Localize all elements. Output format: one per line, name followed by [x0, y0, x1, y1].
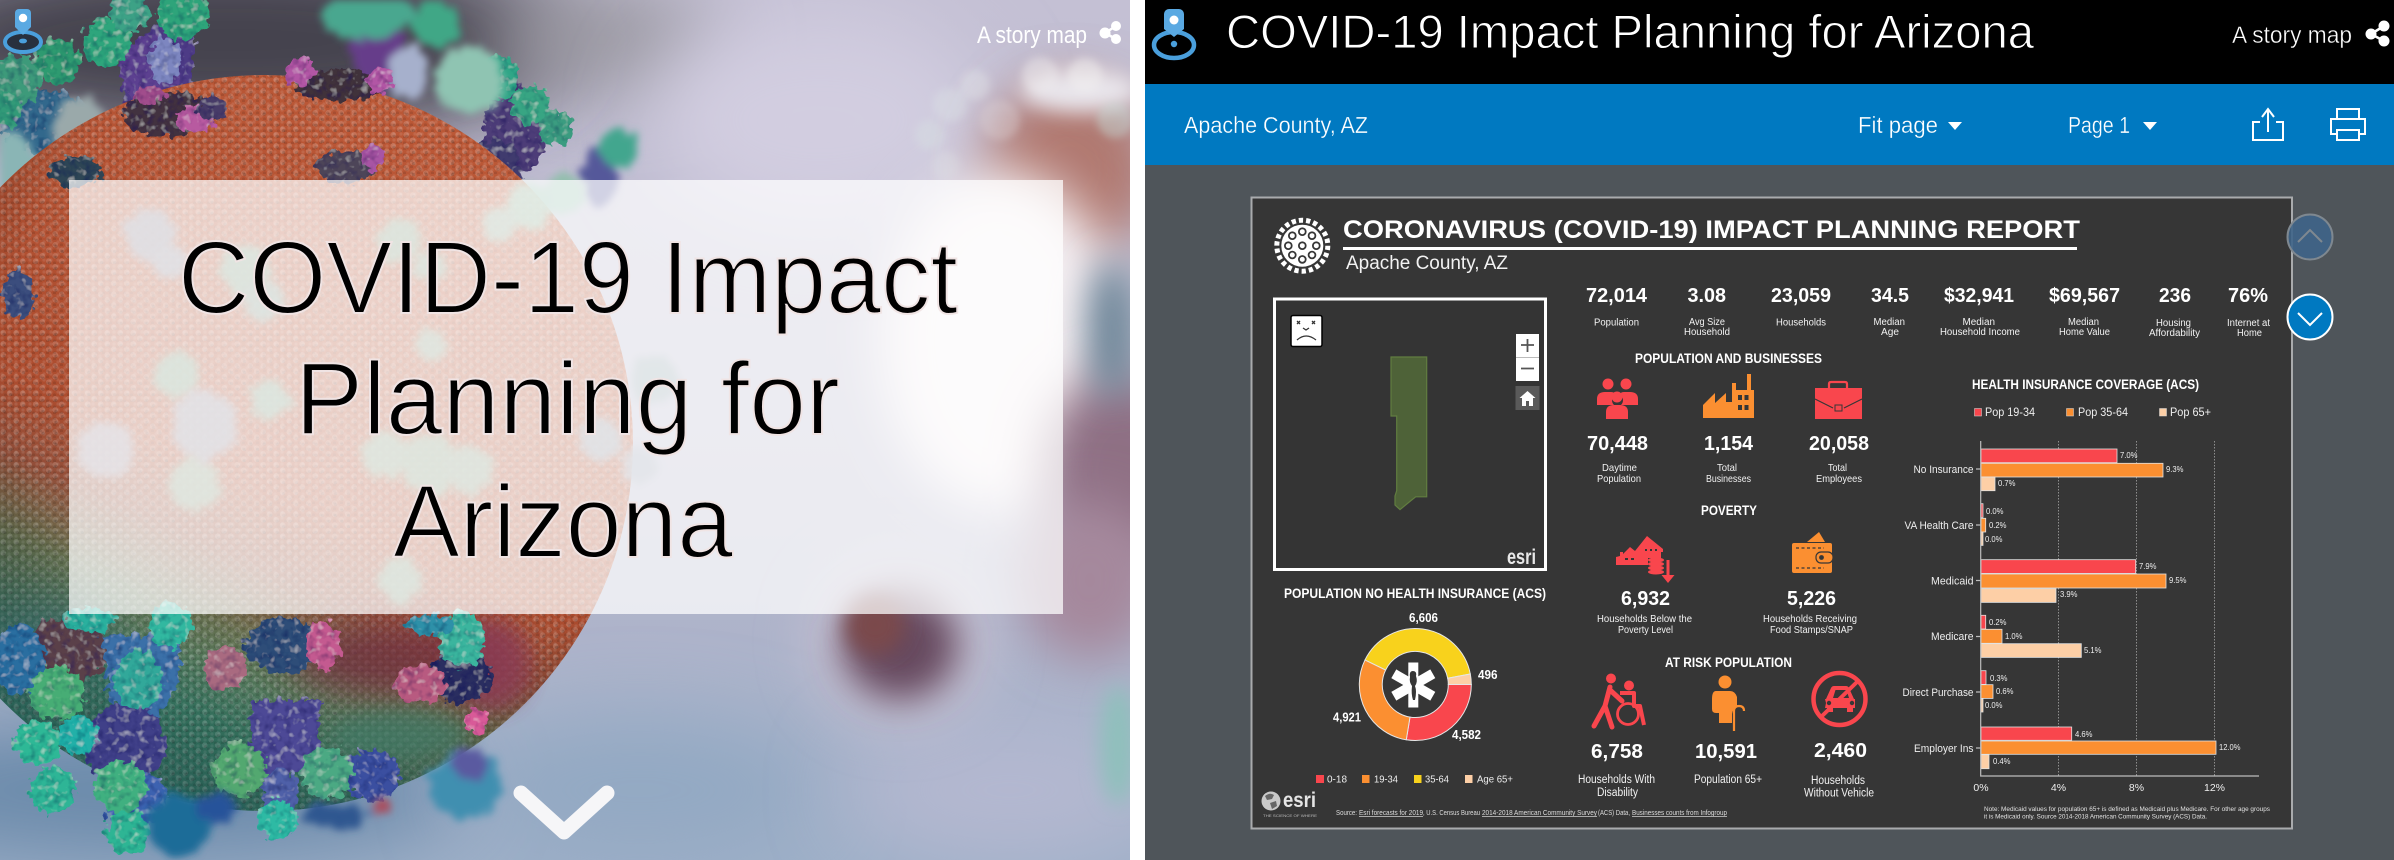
fit page dropdown: Fit page [1858, 112, 1938, 138]
stat: population: 72,014 [1586, 285, 1648, 307]
source note: Source: [1336, 810, 1357, 817]
stat: daytime population: Daytime [1602, 462, 1637, 474]
donut heading: POPULATION NO HEALTH INSURANCE (ACS) [1284, 586, 1546, 601]
esri logo: esri [1283, 789, 1316, 812]
stat: total employees: 20,058 [1809, 432, 1869, 455]
bar value labels: 0.3% [1990, 673, 2008, 683]
icon: people [1597, 378, 1638, 419]
stat: daytime population: 70,448 [1587, 432, 1648, 455]
stat: households below poverty: 6,932 [1621, 587, 1670, 610]
stat: median household income: $32,941 [1944, 285, 2014, 307]
stat: total businesses: Total [1717, 462, 1737, 474]
axis labels: 0% [1973, 782, 1989, 794]
stat: households below poverty: Poverty Level [1618, 624, 1673, 636]
bar value labels: 9.3% [2166, 464, 2184, 474]
stat: population: Population [1594, 318, 1639, 328]
stat: housing affordability: Housing [2156, 318, 2191, 329]
bar value labels: 7.0% [2120, 450, 2138, 460]
esri logo [1262, 789, 1317, 818]
stat: daytime population: Population [1597, 473, 1641, 485]
source note: Businesses counts from Infogroup [1632, 810, 1727, 817]
bar value labels: 0.0% [1985, 534, 2003, 544]
chart legend: Pop 35-64 [2078, 407, 2129, 419]
stat: households with disability: Disability [1597, 787, 1638, 799]
icon: no vehicle [1814, 673, 1866, 725]
donut value labels: 496 [1478, 668, 1498, 682]
donut value labels [1333, 611, 1498, 742]
esri logo: THE SCIENCE OF WHERE [1263, 813, 1317, 818]
stat: households without vehicle: Households [1811, 775, 1865, 787]
stat: internet at home: Home [2237, 328, 2262, 339]
second blurred virus, upper right [881, 50, 1130, 678]
stat: daytime population [1587, 432, 1648, 485]
viewer background [1145, 165, 2394, 860]
stat: population 65+: Population 65+ [1694, 774, 1762, 786]
key statistics row [1586, 285, 2270, 339]
background: blurred lab scene [0, 0, 1170, 860]
bar value labels: 5.1% [2084, 645, 2102, 655]
title box [69, 180, 1063, 614]
stat: households receiving SNAP [1763, 587, 1857, 636]
stat: households receiving SNAP: Households Receiving [1763, 613, 1857, 625]
stat: median age: Age [1881, 327, 1899, 338]
category labels: VA Health Care [1904, 520, 1974, 532]
icon: share [2366, 21, 2389, 46]
section: population and businesses [1587, 351, 1869, 485]
map panel [1274, 299, 1546, 570]
bar value labels: 0.7% [1998, 478, 2016, 488]
bar value labels: 0.2% [1989, 617, 2007, 627]
icon: wallet [1792, 532, 1833, 573]
stat: internet at home: 76% [2228, 285, 2268, 307]
page dropdown: Page 1 [2068, 112, 2130, 138]
source note: (ACS) Data, [1598, 810, 1630, 817]
stat: median home value: Median [2068, 317, 2099, 328]
axis labels: 4% [2051, 782, 2066, 794]
icon: coronavirus [1277, 220, 1328, 271]
map zoom controls [1516, 334, 1539, 381]
stat: housing affordability: Affordability [2149, 328, 2200, 339]
heading: POVERTY [1701, 503, 1757, 518]
icon: story map logo header [1154, 9, 1194, 58]
bar value labels [1985, 450, 2241, 766]
category labels: Employer Ins [1914, 743, 1974, 755]
bar value labels: 0.4% [1993, 756, 2011, 766]
icon: broken map sad face [1291, 316, 1322, 346]
map: Apache County shape [1391, 357, 1427, 510]
stat: households with disability: Households With [1578, 774, 1655, 786]
source note: 2014-2018 American Community Survey [1482, 810, 1597, 817]
stat: internet at home [2227, 285, 2270, 339]
heading: AT RISK POPULATION [1665, 655, 1792, 670]
bars: VA health care [1981, 504, 1986, 545]
bar value labels: 3.9% [2060, 589, 2078, 599]
title text: COVID-19 Impact [178, 220, 958, 335]
bar value labels: 7.9% [2139, 561, 2157, 571]
report subtitle: Apache County, AZ [1346, 253, 1508, 274]
spikes ghosted under the title box [77, 175, 679, 602]
esri map watermark: esri [1507, 546, 1536, 569]
stat: average household size: Household [1684, 327, 1730, 338]
stat: median age [1871, 285, 1909, 338]
icon: star of life [1391, 662, 1435, 708]
stat: population 65+: 10,591 [1695, 740, 1757, 763]
donut legend: 0-18 [1327, 774, 1347, 786]
"A story map" link: A story map [2232, 22, 2352, 49]
map home button [1516, 386, 1540, 410]
donut legend [1316, 774, 1513, 786]
stat: internet at home: Internet at [2227, 318, 2270, 329]
stat: median household income: Household Income [1940, 327, 2020, 338]
stat: households receiving SNAP: Food Stamps/SNAP [1770, 624, 1853, 636]
surface and silhouette clusters, bottom [0, 603, 494, 854]
location label: Apache County, AZ [1184, 112, 1368, 138]
bar value labels: 12.0% [2219, 742, 2241, 752]
stat: households with disability: 6,758 [1591, 740, 1643, 763]
grid lines [2058, 441, 2214, 776]
bar chart panel: health insurance coverage [1902, 377, 2271, 820]
button: next page [2288, 294, 2332, 340]
section: poverty [1597, 503, 1857, 636]
heading: POPULATION AND BUSINESSES [1635, 351, 1822, 366]
soft clusters below the sphere [146, 749, 501, 857]
bar value labels: 0.6% [1996, 686, 2014, 696]
arrow: scroll down chevron [521, 793, 607, 832]
stat: total businesses [1704, 432, 1754, 485]
chart legend: Pop 65+ [2170, 407, 2211, 419]
icon: factory [1703, 374, 1754, 418]
stat: population [1586, 285, 1648, 328]
icon: houses with falling coins [1616, 536, 1674, 583]
blurred distant virus, lower right [806, 582, 1130, 806]
stat: median home value: $69,567 [2049, 285, 2120, 307]
source note: Esri forecasts for 2019 [1359, 810, 1423, 817]
stat: households without vehicle: Without Vehicle [1804, 788, 1874, 800]
stat: total businesses: Businesses [1706, 473, 1751, 485]
stat: median age: Median [1874, 317, 1905, 328]
donut chart panel [1284, 586, 1546, 786]
stat: total employees: Total [1828, 462, 1847, 474]
soft out-of-focus spikes [0, 0, 640, 208]
category labels: No Insurance [1914, 464, 1974, 476]
axes [1976, 441, 2259, 776]
donut legend: 19-34 [1374, 774, 1398, 786]
source note [1336, 810, 1727, 817]
header bar [1145, 0, 2394, 84]
chart legend [1974, 407, 2211, 419]
stat: average household size: 3.08 [1688, 285, 1726, 307]
stat: households: 23,059 [1771, 285, 1831, 307]
donut legend: Age 65+ [1477, 774, 1513, 786]
stat: median household income [1940, 285, 2020, 338]
chart heading: HEALTH INSURANCE COVERAGE (ACS) [1972, 377, 2199, 392]
chart footnote: Note: Medicaid values for population 65+ is defined as Medicaid plus Medicare. For other age groups [1984, 806, 2271, 813]
stat: households [1771, 285, 1831, 328]
stat: housing affordability: 236 [2159, 285, 2191, 307]
stat: households without vehicle [1804, 739, 1874, 800]
stat: total employees [1809, 432, 1869, 485]
stat: total employees: Employees [1816, 473, 1862, 485]
stat: median age: 34.5 [1871, 285, 1909, 307]
surface clusters, top [2, 58, 393, 319]
icon: print [2331, 109, 2365, 140]
stat: median home value [2049, 285, 2120, 338]
bars: direct purchase [1981, 671, 1993, 712]
stat: households receiving SNAP: 5,226 [1787, 587, 1836, 610]
header title: COVID-19 Impact Planning for Arizona [1226, 5, 2035, 58]
donut legend: 35-64 [1425, 774, 1449, 786]
bars: medicare [1981, 615, 2081, 657]
bars: no insurance [1981, 449, 2163, 491]
icon: briefcase [1815, 382, 1862, 419]
axis labels: 12% [2204, 782, 2225, 794]
bars: medicaid [1981, 560, 2166, 602]
main virus sphere [0, 75, 633, 811]
panel: report viewer [1145, 0, 2394, 860]
bar value labels: 0.0% [1985, 700, 2003, 710]
icon: share [1100, 22, 1120, 44]
button: previous page [2288, 214, 2332, 260]
"A story map" link: A story map [977, 22, 1087, 49]
panel: report page [1252, 198, 2292, 828]
axis labels: 8% [2129, 782, 2144, 794]
stat: average household size [1684, 285, 1730, 338]
category labels: Direct Purchase [1902, 687, 1974, 699]
stat: average household size: Avg Size [1689, 317, 1725, 328]
bar value labels: 1.0% [2005, 631, 2023, 641]
stat: total businesses: 1,154 [1704, 432, 1754, 455]
chart footnote [1984, 806, 2271, 820]
chart legend: Pop 19-34 [1985, 407, 2036, 419]
toolbar [1145, 84, 2394, 165]
report title: CORONAVIRUS (COVID-19) IMPACT PLANNING REPORT [1343, 216, 2080, 244]
title text [182, 240, 958, 559]
stat: households below poverty [1597, 587, 1692, 636]
icon: export [2253, 109, 2283, 140]
stat: population 65+ [1694, 740, 1762, 786]
stat: households without vehicle: 2,460 [1814, 739, 1867, 762]
donut value labels: 6,606 [1409, 611, 1438, 625]
stat: housing affordability [2149, 285, 2200, 339]
stat: median household income: Median [1962, 317, 1995, 328]
bar value labels: 9.5% [2169, 575, 2187, 585]
category labels: Medicaid [1931, 576, 1974, 588]
title rule [1343, 247, 2077, 250]
category labels [1902, 464, 1974, 755]
icon: person pushing wheelchair [1594, 674, 1644, 727]
bar value labels: 0.0% [1986, 506, 2004, 516]
category labels: Medicare [1931, 631, 1974, 643]
panel: story map cover [0, 0, 1200, 860]
icon: elderly person with cane [1712, 676, 1744, 731]
top spikes behind sphere [0, 0, 573, 191]
source note: , U.S. Census Bureau [1423, 810, 1480, 817]
title text: Arizona [393, 464, 734, 579]
axis labels [1973, 782, 2225, 794]
donut chart [1359, 629, 1471, 741]
stat: median home value: Home Value [2059, 327, 2110, 338]
icon: story map logo [5, 9, 41, 52]
bars: employer insurance [1981, 727, 2216, 769]
bar value labels: 4.6% [2075, 729, 2093, 739]
stat: households: Households [1776, 318, 1826, 328]
donut value labels: 4,582 [1452, 728, 1481, 742]
donut value labels: 4,921 [1333, 710, 1361, 724]
bar value labels: 0.2% [1989, 520, 2007, 530]
stat: households with disability [1578, 740, 1655, 799]
section: at risk population [1578, 655, 1874, 800]
stat: households below poverty: Households Below the [1597, 613, 1692, 625]
title text: Planning for [295, 341, 840, 456]
chart footnote: it is Medicaid only. Source 2014-2018 American Community Survey (ACS) Data. [1984, 814, 2207, 820]
